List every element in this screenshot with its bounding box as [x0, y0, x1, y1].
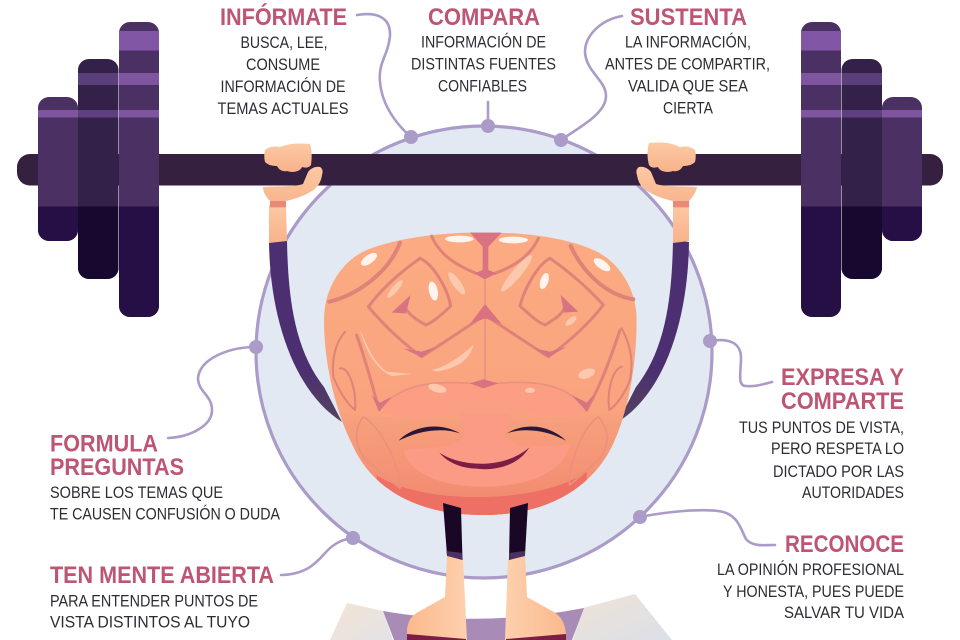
right sole [506, 634, 566, 640]
text: TEN MENTE ABIERTA [50, 562, 274, 632]
text: COMPARA: COMPARA [428, 4, 540, 31]
text: INFÓRMATE [218, 3, 348, 118]
text: TEN MENTE ABIERTA: PARA ENTENDER PUNTOS DE [50, 592, 258, 610]
fold joints [372, 233, 595, 412]
text: FORMULA PREGUNTAS: SOBRE LOS TEMAS QUE [50, 484, 223, 502]
mouth [439, 447, 529, 469]
text: INFÓRMATE: TEMAS ACTUALES [218, 100, 348, 118]
barbell [17, 22, 943, 318]
central circle [256, 126, 712, 578]
text: SUSTENTA: CIERTA [663, 100, 713, 118]
brain character [320, 230, 640, 520]
text: FORMULA PREGUNTAS: TE CAUSEN CONFUSIÓN O DUDA [50, 504, 280, 524]
text: INFÓRMATE: INFORMACIÓN DE [220, 77, 346, 96]
left plates [38, 22, 159, 318]
bar [17, 154, 943, 186]
text: EXPRESA Y COMPARTE: TUS PUNTOS DE VISTA, [739, 419, 904, 437]
soft highlights [360, 252, 596, 395]
text: SUSTENTA: ANTES DE COMPARTIR, [605, 56, 770, 74]
text: COMPARA: INFORMACIÓN DE [421, 32, 546, 52]
face band [337, 412, 623, 520]
text: INFÓRMATE: CONSUME [246, 56, 320, 74]
left leg [407, 556, 467, 640]
text: COMPARA: CONFIABLES [438, 78, 527, 96]
chin red edge [376, 472, 587, 515]
text: RECONOCE: RECONOCE [785, 531, 904, 558]
text: FORMULA PREGUNTAS: PREGUNTAS [50, 454, 184, 481]
text: COMPARA: DISTINTAS FUENTES [411, 56, 556, 74]
text: TEN MENTE ABIERTA: TEN MENTE ABIERTA [50, 562, 274, 589]
text: SUSTENTA: SUSTENTA [630, 4, 747, 31]
forehead [383, 382, 590, 418]
highlights [359, 236, 612, 301]
left eye [399, 427, 460, 441]
sock bands [446, 551, 525, 560]
text: FORMULA PREGUNTAS: FORMULA [50, 430, 158, 458]
text: RECONOCE: SALVAR TU VIDA [784, 604, 904, 622]
text: EXPRESA Y COMPARTE: PERO RESPETA LO [771, 440, 904, 458]
text: INFÓRMATE: BUSCA, LEE, [240, 34, 328, 52]
left arm [263, 143, 342, 422]
brain body [320, 230, 640, 520]
right sock [509, 503, 528, 560]
text: SUSTENTA: VALIDA QUE SEA [628, 78, 748, 96]
right leg [505, 556, 566, 640]
cheeks and nose area [403, 413, 571, 487]
floor mat and platform [330, 594, 672, 640]
text: RECONOCE: Y HONESTA, PUES PUEDE [723, 583, 904, 601]
text: TEN MENTE ABIERTA: VISTA DISTINTOS AL TUYO [50, 614, 250, 632]
text: EXPRESA Y COMPARTE [739, 364, 904, 502]
text: SUSTENTA: LA INFORMACIÓN, [625, 32, 751, 52]
right arm [618, 142, 697, 422]
text: EXPRESA Y COMPARTE: EXPRESA Y [781, 364, 904, 391]
connector nodes [249, 119, 717, 545]
text: EXPRESA Y COMPARTE: DICTADO POR LAS [773, 463, 904, 481]
left sock [443, 503, 462, 560]
left sole [407, 634, 466, 640]
brain folds [329, 236, 633, 488]
text: SUSTENTA [605, 4, 770, 118]
text: FORMULA PREGUNTAS [50, 430, 280, 524]
connector lines [168, 14, 775, 575]
text: COMPARA [411, 4, 556, 96]
text: EXPRESA Y COMPARTE: COMPARTE [781, 388, 904, 415]
right plates [801, 22, 922, 318]
text: INFÓRMATE: INFÓRMATE [220, 3, 347, 31]
text: RECONOCE [717, 531, 904, 622]
legs and shoes [407, 556, 566, 640]
right eye [507, 427, 566, 441]
text: EXPRESA Y COMPARTE: AUTORIDADES [802, 484, 904, 502]
text: RECONOCE: LA OPINIÓN PROFESIONAL [717, 560, 904, 579]
socks [443, 503, 528, 560]
